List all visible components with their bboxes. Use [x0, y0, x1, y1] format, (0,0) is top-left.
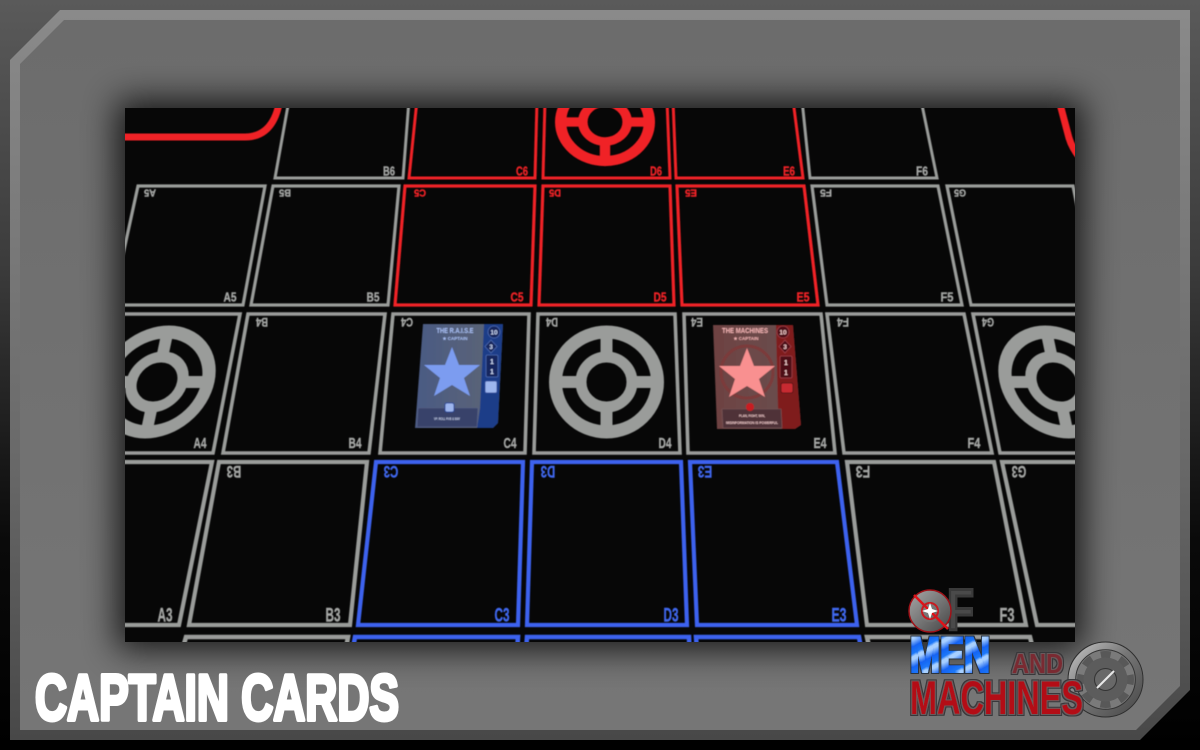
cell C3 [358, 462, 523, 626]
blue captain card [415, 324, 503, 428]
objective target A4 [125, 324, 216, 440]
logo word MACHINES: MACHINES [910, 671, 1083, 724]
cell C6 [409, 100, 537, 178]
cell A5 [112, 186, 265, 305]
logo [909, 578, 1143, 724]
cell C3: C3 [494, 606, 510, 626]
cell D5: D5 [549, 186, 561, 198]
cell A3 [125, 459, 215, 628]
red card stat box: 1 [784, 360, 788, 367]
cell A3: A3 [158, 606, 172, 626]
cell G5 [947, 186, 1097, 305]
cell E3: E3 [698, 462, 712, 481]
cell A4 [125, 312, 243, 456]
cell D4: D4 [658, 435, 672, 452]
game board [125, 108, 1075, 642]
blue card star [424, 347, 480, 396]
cell D6 [543, 100, 670, 178]
logo word MEN: MEN [910, 627, 990, 683]
red card ability icon [781, 383, 793, 393]
red card star [719, 348, 775, 397]
red card name: THE MACHINES [722, 328, 768, 335]
logo word OF: F [947, 578, 974, 643]
cell C5 [395, 186, 535, 305]
cell C3: C3 [384, 462, 398, 481]
cell F4: F4 [968, 435, 981, 452]
cell G5: G5 [954, 186, 966, 198]
cell F4: F4 [837, 315, 849, 329]
cell D6: D6 [650, 164, 662, 178]
red card ability text: MISINFORMATION IS POWERFUL [726, 420, 778, 425]
cell B4: B4 [348, 435, 362, 452]
logo word AND: AND [1012, 648, 1063, 679]
cell F3: F3 [1000, 606, 1014, 626]
red deployment zone corner right [1060, 104, 1080, 158]
cell F6: F6 [916, 164, 928, 178]
red captain card [713, 325, 801, 429]
cell B5: B5 [279, 186, 291, 198]
cell D4 [534, 314, 680, 453]
cell C4 [380, 314, 529, 453]
cell B5 [251, 186, 399, 305]
red card ability text [726, 413, 778, 425]
blue card stat box: 1 [490, 359, 494, 366]
cell B5: B5 [366, 290, 380, 304]
cell E6 [673, 100, 803, 178]
cell F3 [847, 462, 1026, 626]
cell E4 [684, 314, 835, 453]
cell F4 [827, 314, 992, 453]
cell E5 [677, 186, 818, 305]
blue card stat box: 1 [490, 369, 494, 376]
red card small icon [746, 403, 754, 411]
blue card ability text: VP: ROLL FIVE & WAY [434, 416, 460, 421]
cell D3: D3 [541, 462, 555, 481]
cell E4: E4 [814, 435, 827, 452]
cell B3: B3 [326, 606, 340, 626]
blue card side strip [477, 324, 503, 428]
blue card ability icon [485, 381, 497, 393]
cell E5: E5 [685, 186, 697, 198]
red card text box [722, 409, 782, 428]
blue card diamond badge: 3 [489, 344, 493, 351]
blue card text box [417, 408, 478, 427]
cell C5: C5 [414, 186, 426, 198]
cell D5 [539, 186, 674, 305]
cell G4 [970, 312, 1075, 456]
cell E6: E6 [783, 164, 795, 178]
cell F3: F3 [856, 462, 870, 481]
cell C6: C6 [516, 164, 528, 178]
cell B6: B6 [383, 164, 395, 178]
row 2 cell tops [182, 634, 1034, 642]
cell A5: A5 [224, 290, 236, 304]
cell E5: E5 [796, 290, 810, 304]
logo gear [1068, 642, 1143, 717]
red objective target D6 [554, 108, 656, 167]
red card diamond badge: 3 [783, 344, 787, 351]
cell D4: D4 [546, 315, 558, 329]
blue card cost badge: 10 [490, 330, 498, 336]
red deployment zone corner left [120, 104, 279, 137]
blue card name: THE R.A.I.S.E [436, 328, 474, 335]
cell C4: C4 [401, 315, 413, 329]
cell F5: F5 [940, 290, 954, 304]
blue card small icon [445, 403, 454, 412]
cell G3: G3 [1012, 462, 1026, 481]
cell A4: A4 [194, 435, 207, 452]
cell D3 [527, 462, 687, 626]
cell D3: D3 [664, 606, 678, 626]
title: CAPTAIN CARDS [35, 661, 399, 734]
cell D5: D5 [654, 290, 666, 304]
red card stat box [780, 356, 792, 378]
cell F6 [802, 100, 937, 178]
cell B3: B3 [227, 462, 241, 481]
blue card subtitle: ★ CAPTAIN [443, 336, 467, 341]
cell A5: A5 [144, 186, 156, 198]
cell C5: C5 [510, 290, 524, 304]
cell B6 [275, 100, 409, 178]
cell B4: B4 [256, 315, 268, 329]
cell E3: E3 [832, 606, 846, 626]
red card side strip [776, 325, 801, 429]
cell B4 [223, 314, 385, 453]
cell F5: F5 [820, 186, 832, 198]
cell C4: C4 [504, 435, 517, 452]
logo word OF: O [918, 596, 942, 629]
cell G4: G4 [982, 315, 994, 329]
cell F5 [812, 186, 962, 305]
objective target G4 [998, 324, 1075, 440]
cell G3 [998, 459, 1075, 628]
board shadow [117, 100, 1083, 650]
red card subtitle: ★ CAPTAIN [734, 336, 758, 341]
cell E4: E4 [691, 315, 703, 329]
red card emblem ring [721, 346, 773, 398]
red card ability text: PLAN, FIGHT, WIN, [739, 413, 765, 418]
red card cost badge: 10 [779, 330, 787, 336]
red card stat box: 1 [784, 370, 788, 377]
cell E3 [690, 462, 857, 626]
cell B3 [189, 462, 367, 626]
blue card stat box [486, 355, 498, 377]
logo word OF [909, 578, 974, 643]
objective target D4 [556, 332, 658, 432]
